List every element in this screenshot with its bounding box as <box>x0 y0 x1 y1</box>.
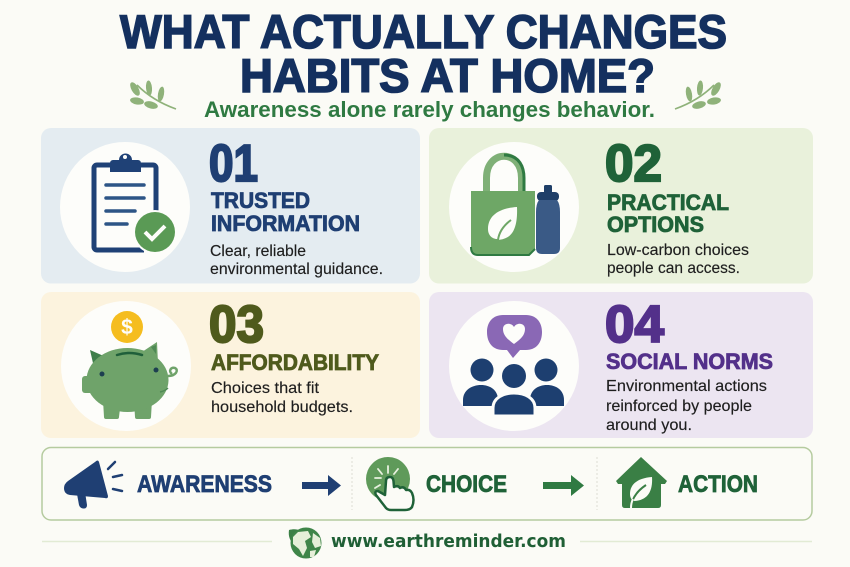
footer url: www.earthreminder.com <box>331 531 566 552</box>
heading: trusted information: INFORMATION <box>211 211 360 236</box>
icon: right leaf sprig <box>675 80 723 110</box>
arrow: awareness to choice <box>302 475 341 496</box>
title <box>120 5 727 102</box>
number 03: 03 <box>209 296 264 354</box>
icon: hand pressing button <box>366 457 414 510</box>
number 04: 04 <box>605 296 664 354</box>
number 02: 02 <box>605 135 662 193</box>
description: Choices that fit <box>211 380 320 397</box>
description: around you. <box>606 417 692 434</box>
heading: affordability: AFFORDABILITY <box>211 350 379 375</box>
panel: affordability <box>41 292 420 438</box>
title: WHAT ACTUALLY CHANGES <box>120 5 727 58</box>
label: awareness: AWARENESS <box>137 471 272 498</box>
icon: globe with leaf <box>289 528 322 558</box>
subtitle: Awareness alone rarely changes behavior. <box>204 97 655 122</box>
description: reinforced by people <box>606 398 752 415</box>
arrow: choice to action <box>543 475 584 496</box>
description: environmental guidance. <box>210 261 383 278</box>
description: Low-carbon choices <box>607 242 749 259</box>
icon: megaphone <box>64 460 122 509</box>
icon: tote bag and water bottle <box>471 155 560 255</box>
heading: trusted information: TRUSTED <box>211 188 310 213</box>
icon: piggy bank with coin <box>82 311 177 419</box>
heading: social norms: SOCIAL NORMS <box>606 349 773 374</box>
heading: practical options: PRACTICAL <box>607 190 729 215</box>
icon: piggy bank with coin: $ <box>121 316 133 339</box>
title: HABITS AT HOME? <box>240 49 655 102</box>
description: people can access. <box>607 260 740 277</box>
description: Environmental actions <box>606 378 767 395</box>
description: household budgets. <box>211 399 353 416</box>
panel: trusted information <box>41 128 420 284</box>
panel: social norms <box>429 292 813 438</box>
label: choice: CHOICE <box>426 471 507 498</box>
panel: practical options <box>429 128 813 284</box>
icon: left leaf sprig <box>128 80 176 110</box>
panel: awareness to action flow <box>42 448 812 520</box>
icon: clipboard with check mark <box>94 154 177 254</box>
icon: house with leaf <box>616 457 667 508</box>
heading: practical options: OPTIONS <box>607 212 704 237</box>
icon: people with heart speech bubble <box>463 315 564 416</box>
number 01: 01 <box>209 135 258 193</box>
description: Clear, reliable <box>210 243 306 260</box>
label: action: ACTION <box>678 471 758 498</box>
